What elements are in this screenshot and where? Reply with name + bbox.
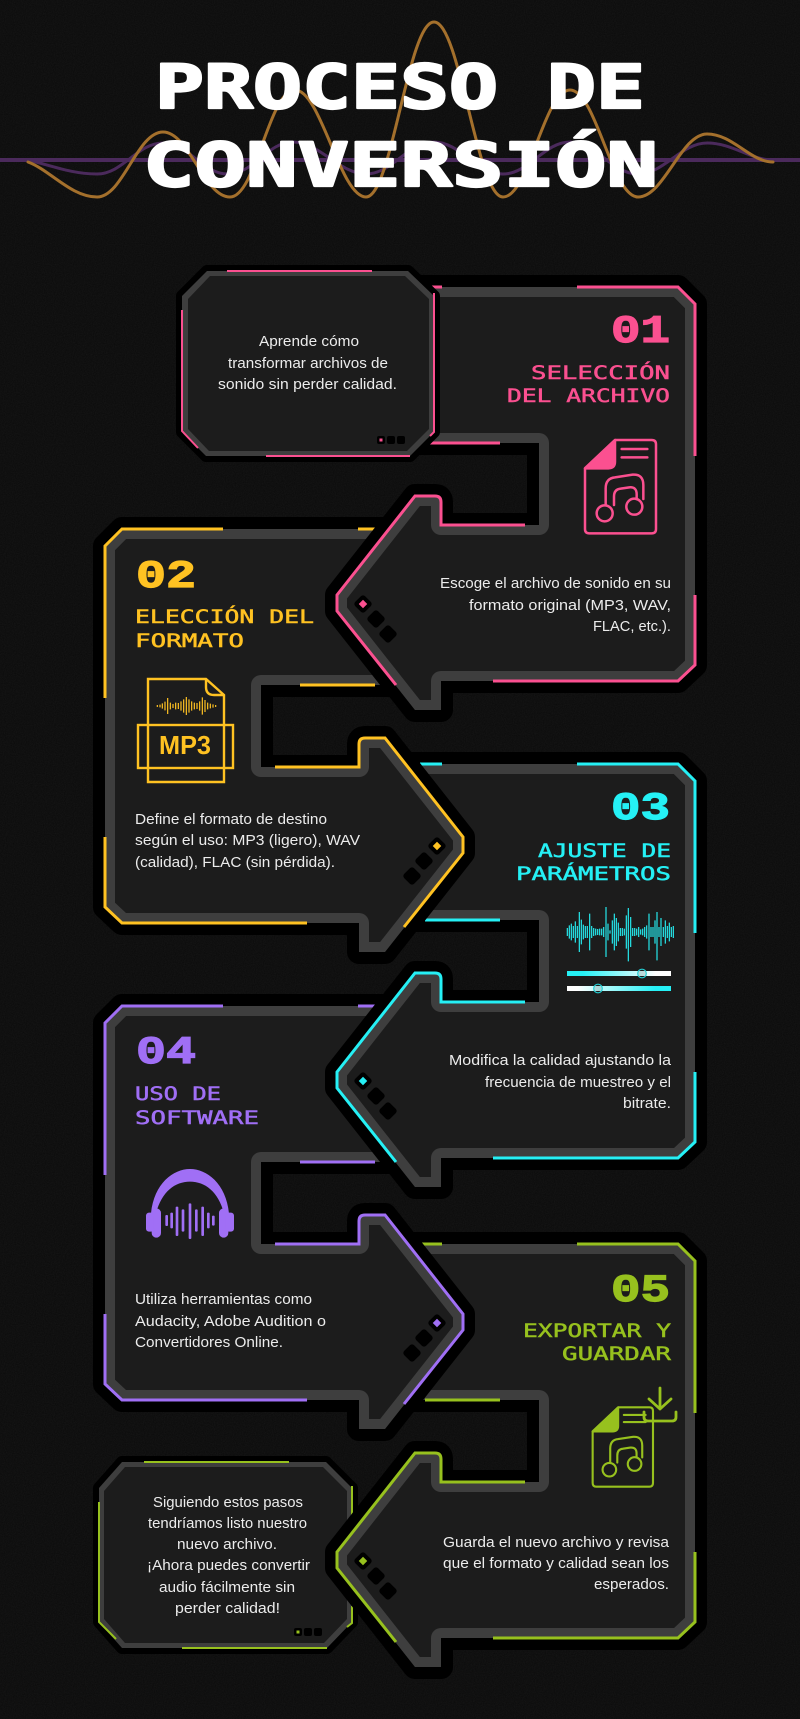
text 04: Convertidores Online. (135, 1334, 283, 1351)
text 03 (449, 1052, 672, 1112)
text 01: Escoge el archivo de sonido en su (440, 575, 671, 592)
number 01: 01 (611, 310, 670, 354)
text 05: que el formato y calidad sean los (443, 1555, 669, 1572)
title (143, 52, 658, 201)
text 05: esperados. (594, 1576, 669, 1593)
intro text (218, 333, 397, 393)
heading 02: ELECCIÓN DEL (135, 604, 314, 628)
closing text: perder calidad! (175, 1600, 280, 1617)
panel: step 03 (337, 764, 695, 1187)
text 02: (calidad), FLAC (sin pérdida). (135, 854, 335, 871)
panel: step 04 (105, 1006, 463, 1429)
text 04: Audacity, Adobe Audition o (135, 1313, 326, 1330)
panel: closing message (99, 1462, 352, 1648)
icon: headphones (146, 1169, 234, 1239)
heading 05: GUARDAR (562, 1343, 672, 1365)
icon: MP3 file: MP3 (159, 730, 211, 760)
panel: intro (182, 271, 434, 456)
intro text: Aprende cómo (259, 333, 359, 350)
closing text: Siguiendo estos pasos (153, 1494, 303, 1511)
icon: export audio file (593, 1388, 676, 1487)
heading 04: USO DE (135, 1083, 221, 1105)
heading 04: SOFTWARE (135, 1107, 259, 1129)
title: PROCESO DE (155, 52, 645, 123)
icon: waveform and sliders (567, 907, 673, 993)
title: CONVERSIÓN (143, 130, 658, 201)
heading 01: SELECCIÓN (531, 360, 670, 384)
heading 05 (523, 1320, 672, 1365)
panel: step 01 (337, 287, 695, 710)
heading 05: EXPORTAR Y (523, 1320, 672, 1342)
closing text (147, 1494, 310, 1617)
sound waves behind title (0, 22, 800, 197)
number 04: 04 (136, 1031, 196, 1075)
text 04 (135, 1291, 326, 1351)
heading 01 (507, 360, 670, 407)
text 01: formato original (MP3, WAV, (469, 597, 671, 614)
text 02: según el uso: MP3 (ligero), WAV (135, 832, 360, 849)
panel: step 05 (337, 1244, 695, 1667)
intro text: transformar archivos de (228, 355, 388, 372)
text 05: Guarda el nuevo archivo y revisa (443, 1534, 670, 1551)
text 05 (443, 1534, 670, 1593)
text 03: frecuencia de muestreo y el (485, 1074, 671, 1091)
text 03: Modifica la calidad ajustando la (449, 1052, 672, 1069)
text 02: Define el formato de destino (135, 811, 327, 828)
heading 02: FORMATO (135, 630, 244, 652)
heading 03 (516, 840, 671, 885)
text 03: bitrate. (623, 1095, 671, 1112)
number 02: 02 (136, 555, 196, 599)
text 01: FLAC, etc.). (593, 618, 671, 635)
closing text: ¡Ahora puedes convertir (147, 1557, 310, 1574)
heading 04 (135, 1083, 259, 1129)
text 01 (440, 575, 671, 635)
text 04: Utiliza herramientas como (135, 1291, 312, 1308)
heading 03: AJUSTE DE (538, 840, 671, 862)
intro text: sonido sin perder calidad. (218, 376, 397, 393)
panel: step 02 (105, 529, 463, 952)
icon: audio file (585, 440, 656, 533)
closing text: audio fácilmente sin (159, 1579, 295, 1596)
heading 02 (135, 604, 314, 652)
closing text: tendríamos listo nuestro (148, 1515, 307, 1532)
closing text: nuevo archivo. (177, 1536, 277, 1553)
heading 01: DEL ARCHIVO (507, 385, 670, 407)
number 05: 05 (611, 1269, 670, 1313)
number 03: 03 (611, 787, 670, 831)
heading 03: PARÁMETROS (516, 862, 671, 885)
icon: MP3 file (138, 679, 233, 782)
text 02 (135, 811, 360, 871)
